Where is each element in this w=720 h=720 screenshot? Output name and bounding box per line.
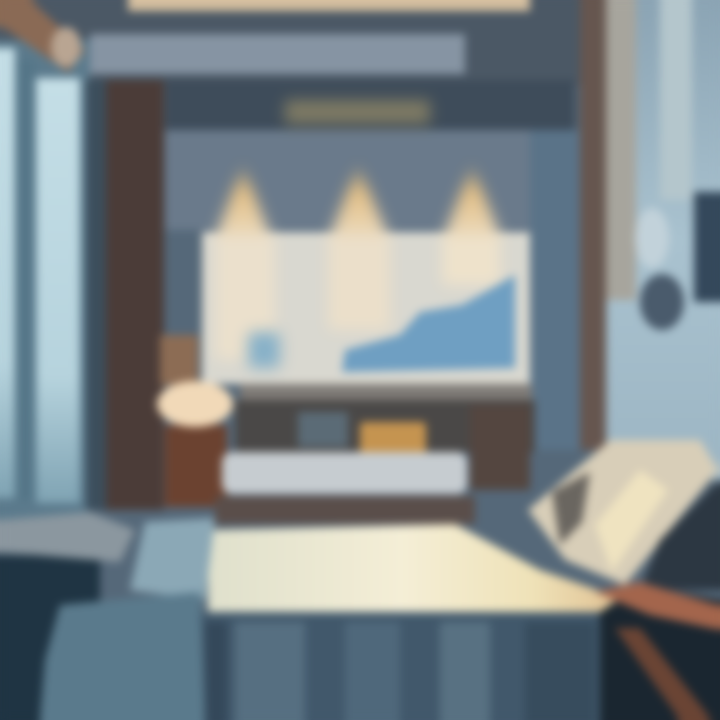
bedroom right dark corner xyxy=(640,480,720,590)
gold wall title xyxy=(285,100,430,124)
area chart xyxy=(342,275,515,372)
bed frame xyxy=(215,496,475,524)
right wooden column xyxy=(580,0,636,450)
ceiling light strip xyxy=(128,0,530,11)
bed frame corner xyxy=(595,582,720,720)
bedside table xyxy=(165,425,227,507)
bedside lamp glow xyxy=(157,335,233,427)
hanging lamps xyxy=(214,165,502,360)
bed sheet xyxy=(208,524,640,618)
wooden pillar xyxy=(86,80,164,510)
duvet foot xyxy=(40,592,620,720)
orange cushion xyxy=(360,422,426,464)
panel background xyxy=(202,232,530,384)
wall chart panel xyxy=(202,165,530,384)
right wall xyxy=(600,0,720,480)
small chart mark xyxy=(248,332,280,368)
pillows xyxy=(222,452,467,494)
ceiling xyxy=(0,0,600,130)
headboard xyxy=(235,400,535,490)
panel shelf xyxy=(240,384,532,400)
blue blanket xyxy=(130,518,215,600)
ceiling beam band xyxy=(90,34,465,74)
top-left wooden beam xyxy=(0,0,85,72)
right wall dark object xyxy=(635,192,720,330)
right side pillows xyxy=(528,440,718,585)
left side table xyxy=(0,512,135,720)
left window xyxy=(0,40,90,520)
